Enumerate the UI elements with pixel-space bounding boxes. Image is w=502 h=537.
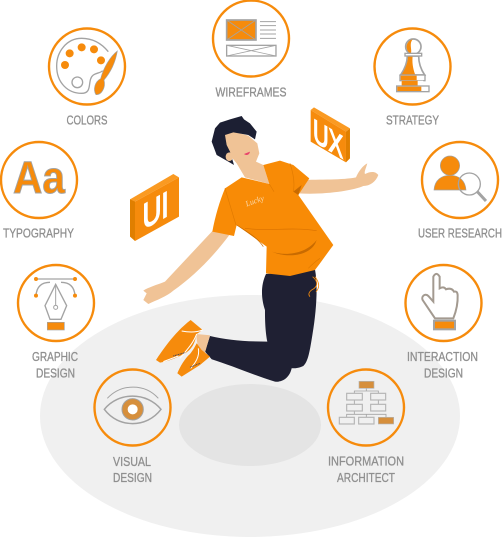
character: shirt shadows: [225, 163, 320, 268]
character: shirt: [212, 161, 333, 276]
label: strategy: STRATEGY: [386, 112, 439, 128]
icon: user and magnifier: [434, 156, 486, 201]
label: information architect: ARCHITECT: [337, 470, 395, 485]
label: colors: COLORS: [66, 112, 108, 128]
label: graphic design: [32, 349, 78, 380]
character: drawstring: [309, 277, 319, 297]
character: back arm: [298, 163, 378, 194]
label: visual design: [113, 454, 152, 485]
interaction design item: [406, 265, 482, 380]
visual design item: [94, 370, 170, 485]
character: face and neck: [224, 132, 269, 184]
label: typography: TYPOGRAPHY: [3, 226, 74, 240]
icon: chess pawn: [397, 39, 429, 92]
typography ring: [1, 142, 77, 218]
interaction design ring: [406, 265, 482, 341]
label: interaction design: DESIGN: [424, 366, 463, 380]
character: front arm: [143, 230, 229, 304]
character: hair: [212, 116, 257, 165]
character: shirt logo: Lucky: [243, 193, 266, 209]
icon: pen tool: [34, 277, 77, 330]
label: wireframes: WIREFRAMES: [216, 84, 287, 100]
label: information architect: [328, 454, 404, 485]
character: ear: [226, 152, 233, 161]
label: graphic design: GRAPHIC: [32, 349, 78, 364]
UX block: UX: [313, 113, 343, 166]
UX block: [311, 107, 350, 166]
strategy ring: [374, 28, 450, 104]
label: visual design: VISUAL: [113, 454, 151, 469]
label: interaction design: INTERACTION: [407, 349, 478, 364]
graphic design ring: [18, 265, 94, 341]
user research ring: [422, 142, 498, 218]
icon: pointing hand: [422, 274, 458, 329]
label: information architect: INFORMATION: [328, 454, 404, 468]
user research item: [418, 142, 502, 240]
label: interaction design: [407, 349, 478, 380]
wireframes ring: [213, 0, 289, 76]
label: visual design: DESIGN: [113, 470, 152, 485]
icon: wireframe layout: [227, 20, 276, 56]
jumping character: [143, 116, 378, 382]
wireframes item: [213, 0, 289, 100]
character: trousers: [205, 269, 317, 382]
visual design ring: [94, 370, 170, 446]
colors item: [49, 28, 125, 128]
information architect item: [328, 370, 404, 485]
icon: eye: [104, 387, 161, 424]
information architect ring: [328, 370, 404, 446]
colors ring: [49, 28, 125, 104]
character: ankle: [196, 334, 210, 353]
UI block: UI: [143, 184, 169, 238]
floor ellipse: [40, 295, 460, 537]
icon: site map: [339, 381, 394, 424]
label: graphic design: DESIGN: [36, 366, 75, 380]
graphic design item: [18, 265, 94, 380]
icon: Aa glyphs: Aa: [13, 152, 66, 203]
strategy item: [374, 28, 450, 128]
typography item: [1, 142, 77, 240]
jump shadow: [179, 384, 321, 466]
character: smile: [244, 152, 250, 155]
icon: palette and brush: [57, 38, 117, 95]
character: shoes: [156, 320, 210, 377]
UI block: [130, 174, 179, 241]
